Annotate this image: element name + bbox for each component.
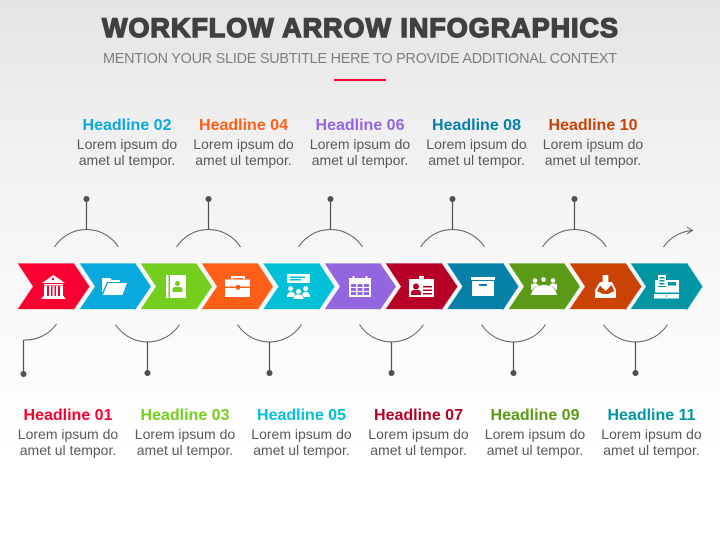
label: headline 02: Headline 02 bbox=[83, 117, 172, 134]
arrow 10 bbox=[569, 262, 642, 312]
arrow 06 bbox=[324, 262, 396, 312]
arrow 09 bbox=[508, 262, 580, 312]
label: headline 07 bbox=[368, 407, 469, 458]
label: headline 05: amet ul tempor. bbox=[253, 442, 350, 458]
top connectors bbox=[54, 196, 692, 247]
connector: bottom 03 bbox=[116, 324, 180, 376]
arrow 11 bbox=[630, 262, 703, 312]
arrow 07 bbox=[385, 262, 458, 312]
label: headline 11: Lorem ipsum do bbox=[601, 426, 702, 442]
arrow 01 bbox=[17, 262, 90, 312]
label: headline 03: Lorem ipsum do bbox=[135, 426, 235, 442]
label: headline 02 bbox=[77, 117, 177, 168]
label: headline 06: Headline 06 bbox=[316, 117, 405, 134]
icon: briefcase bbox=[225, 276, 250, 297]
label: headline 02: amet ul tempor. bbox=[79, 152, 175, 168]
title accent line bbox=[334, 79, 386, 81]
label: headline 01: Lorem ipsum do bbox=[18, 426, 118, 442]
arrow 08 bbox=[446, 262, 519, 312]
label: headline 08: Headline 08 bbox=[432, 117, 521, 134]
label: headline 11 bbox=[601, 407, 702, 458]
icon: calendar bbox=[349, 276, 371, 297]
title: WORKFLOW ARROW INFOGRAPHICS bbox=[102, 13, 618, 43]
connector: top 06 bbox=[298, 196, 362, 247]
icon: bank bbox=[42, 275, 66, 299]
icon: folder bbox=[102, 278, 127, 295]
icon: team presentation bbox=[287, 274, 310, 299]
label: headline 05: Headline 05 bbox=[257, 407, 346, 424]
connector: bottom 05 bbox=[238, 324, 302, 376]
label: headline 04: Headline 04 bbox=[199, 117, 288, 134]
arrow 04 bbox=[201, 262, 274, 312]
label: headline 06: Lorem ipsum do bbox=[310, 136, 410, 152]
connector: top 02 bbox=[54, 196, 118, 247]
label: headline 02: Lorem ipsum do bbox=[77, 136, 177, 152]
icon: meeting bbox=[531, 277, 557, 295]
arrow 05 bbox=[262, 262, 335, 312]
icon: address book bbox=[166, 275, 186, 298]
label: headline 01: Headline 01 bbox=[24, 407, 113, 424]
connector: top 04 bbox=[176, 196, 240, 247]
label: headline 01 bbox=[18, 407, 118, 458]
bottom labels bbox=[18, 407, 702, 458]
label: headline 07: Lorem ipsum do bbox=[368, 426, 469, 442]
icon: cash register bbox=[654, 275, 679, 298]
label: headline 06: amet ul tempor. bbox=[312, 152, 408, 168]
label: headline 03: amet ul tempor. bbox=[137, 442, 233, 458]
label: headline 07: Headline 07 bbox=[374, 407, 463, 424]
label: headline 08: Lorem ipsum do bbox=[426, 136, 527, 152]
label: headline 03 bbox=[135, 407, 235, 458]
label: headline 10: amet ul tempor. bbox=[545, 152, 641, 168]
label: headline 11: Headline 11 bbox=[607, 407, 696, 424]
arrow 02 bbox=[79, 262, 152, 312]
connector: top 08 bbox=[420, 196, 484, 247]
label: headline 09: Lorem ipsum do bbox=[485, 426, 585, 442]
icon: archive box bbox=[471, 277, 495, 296]
connector: bottom 09 bbox=[482, 324, 546, 376]
label: headline 09 bbox=[485, 407, 585, 458]
label: headline 03: Headline 03 bbox=[141, 407, 230, 424]
label: headline 04 bbox=[193, 117, 294, 168]
label: headline 04: Lorem ipsum do bbox=[193, 136, 294, 152]
icon: inbox download bbox=[595, 275, 616, 298]
label: headline 09: Headline 09 bbox=[491, 407, 580, 424]
label: headline 10 bbox=[543, 117, 643, 168]
icon: id badge bbox=[409, 276, 434, 297]
icons bbox=[42, 274, 679, 299]
label: headline 05: Lorem ipsum do bbox=[251, 426, 352, 442]
top labels bbox=[77, 117, 643, 168]
arrow 03 bbox=[140, 262, 212, 312]
label: headline 07: amet ul tempor. bbox=[370, 442, 467, 458]
label: headline 09: amet ul tempor. bbox=[487, 442, 583, 458]
bottom connectors bbox=[20, 324, 668, 377]
connector: bottom 11 bbox=[604, 324, 668, 376]
label: headline 05 bbox=[251, 407, 352, 458]
label: headline 10: Lorem ipsum do bbox=[543, 136, 643, 152]
connector: bottom 07 bbox=[360, 324, 424, 376]
label: headline 01: amet ul tempor. bbox=[20, 442, 116, 458]
label: headline 04: amet ul tempor. bbox=[195, 152, 292, 168]
subtitle: MENTION YOUR SLIDE SUBTITLE HERE TO PROVIDE ADDITIONAL CONTEXT bbox=[103, 51, 617, 67]
arrow chain bbox=[17, 262, 703, 312]
connector: bottom 01 bbox=[20, 324, 56, 377]
label: headline 10: Headline 10 bbox=[549, 117, 638, 134]
label: headline 08: amet ul tempor. bbox=[428, 152, 525, 168]
label: headline 06 bbox=[310, 117, 410, 168]
label: headline 11: amet ul tempor. bbox=[603, 442, 700, 458]
connector: end arrow bbox=[664, 227, 692, 247]
connector: top 10 bbox=[542, 196, 606, 247]
label: headline 08 bbox=[426, 117, 527, 168]
